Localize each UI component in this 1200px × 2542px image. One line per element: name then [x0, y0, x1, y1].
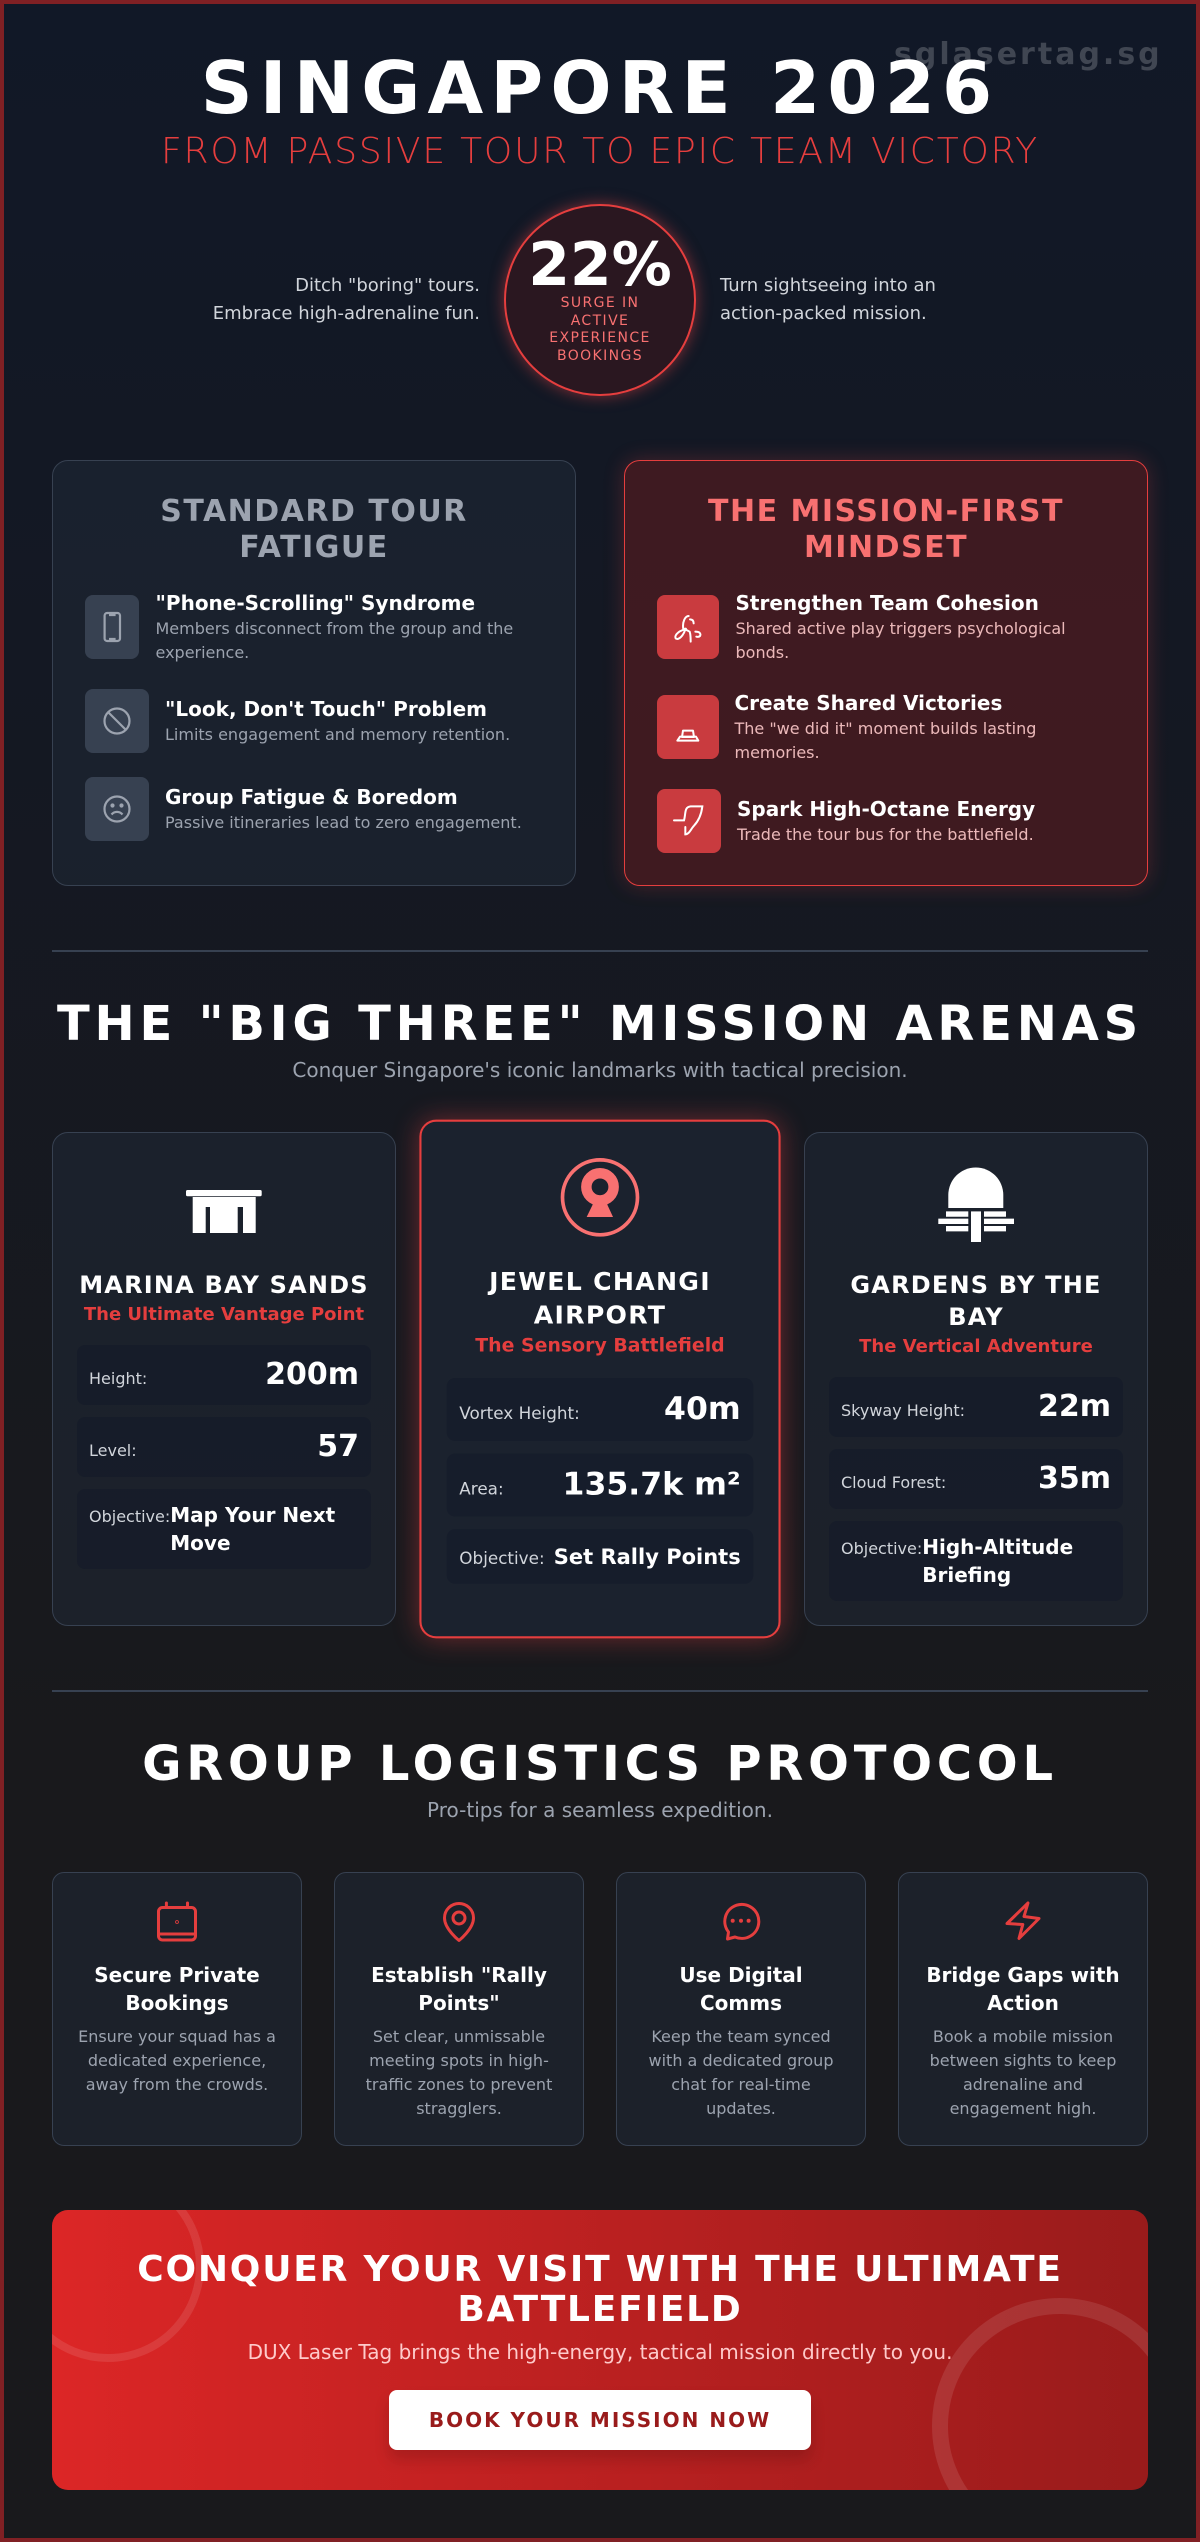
item text: [156, 591, 513, 662]
stat label: BOOKINGS: [557, 348, 643, 364]
heading: big three: THE "BIG THREE" MISSION ARENAS: [57, 996, 1143, 1052]
item text: The "we did it" moment builds lasting memories.: [734, 719, 1036, 762]
item text: [736, 591, 1066, 662]
tip: private bookings: [52, 1872, 302, 2146]
stat: cloud forest: Cloud Forest:: [841, 1473, 946, 1492]
stat: level: [77, 1417, 371, 1477]
text: left of stat: Ditch "boring" tours.: [295, 275, 480, 296]
tip: rally points: [334, 1872, 584, 2146]
panel: standard tour fatigue: [52, 460, 576, 886]
icon: sad face: [85, 777, 149, 841]
item text: Limits engagement and memory retention.: [165, 725, 510, 744]
item text: Strengthen Team Cohesion: [736, 591, 1039, 615]
item text: Spark High-Octane Energy: [737, 797, 1035, 821]
card tagline: The Vertical Adventure: [859, 1336, 1093, 1357]
item text: Passive itineraries lead to zero engagement.: [165, 813, 522, 832]
icon: lightning bolt: [1006, 1901, 1040, 1940]
text: right of stat: [720, 275, 936, 324]
item text: "Look, Don't Touch" Problem: [165, 697, 487, 721]
tip: bridge gaps: [898, 1872, 1148, 2146]
stat: level: Level:: [89, 1441, 137, 1460]
stat circle: 22% surge: [504, 204, 696, 396]
item text: [165, 785, 522, 832]
stat: objective: [829, 1521, 1123, 1601]
card tagline: The Sensory Battlefield: [475, 1335, 725, 1357]
stat: objective: [77, 1489, 371, 1569]
card: jewel changi airport: [419, 1120, 781, 1638]
tip text: Book a mobile mission between sights to keep adrenaline and engagement high.: [930, 2027, 1116, 2118]
card: gardens by the bay: [804, 1132, 1148, 1626]
cta subtext: DUX Laser Tag brings the high-energy, tactical mission directly to you.: [248, 2340, 952, 2364]
watermark: sglasertag.sg: [894, 37, 1163, 72]
icon: prohibited: [85, 689, 149, 753]
stat: height: [77, 1345, 371, 1405]
divider: [52, 1690, 1148, 1692]
subtitle: FROM PASSIVE TOUR TO EPIC TEAM VICTORY: [161, 131, 1039, 172]
icon: map pin: [443, 1902, 475, 1942]
cta heading: CONQUER YOUR VISIT WITH THE ULTIMATE BATTLEFIELD: [137, 2249, 1063, 2330]
item text: Shared active play triggers psychological bonds.: [736, 619, 1066, 662]
stat: vortex height: 40m: [664, 1391, 741, 1427]
tip text: Keep the team synced with a dedicated group chat for real-time updates.: [649, 2027, 833, 2118]
card title: GARDENS BY THE BAY: [850, 1271, 1102, 1331]
stat: area: [447, 1454, 753, 1517]
icon: trophy base: [657, 695, 719, 759]
text: left of stat: [213, 275, 480, 324]
item: high-octane energy: [657, 789, 1035, 853]
stat: height: 200m: [265, 1357, 359, 1392]
subheading: Pro-tips for a seamless expedition.: [427, 1798, 773, 1822]
stat label: SURGE IN: [561, 295, 639, 311]
stat: objective: High-Altitude Briefing: [922, 1535, 1073, 1587]
title: SINGAPORE 2026: [201, 46, 999, 130]
icon: team: [657, 595, 719, 659]
icon: supertree: [938, 1168, 1014, 1242]
stat: height: Height:: [89, 1369, 147, 1388]
cta button: [389, 2390, 811, 2450]
item text: [734, 691, 1036, 762]
item: team cohesion: [657, 591, 1066, 662]
item text: Members disconnect from the group and the experience.: [156, 619, 513, 662]
item: phone scrolling: [85, 591, 513, 662]
stat: objective: [447, 1529, 753, 1584]
stat: skyway height: 22m: [1038, 1389, 1111, 1424]
stat label: ACTIVE: [571, 312, 629, 328]
icon: jewel vortex: [560, 1158, 640, 1237]
item text: [165, 697, 510, 744]
panel heading: THE MISSION-FIRST MINDSET: [708, 494, 1064, 565]
stat: objective: Objective:: [89, 1507, 170, 1526]
divider: [52, 950, 1148, 952]
call to action banner: [52, 2210, 1148, 2490]
stat: cloud forest: [829, 1449, 1123, 1509]
item: group fatigue: [85, 777, 522, 841]
text: left of stat: Embrace high-adrenaline fun.: [213, 303, 480, 324]
icon: phone: [85, 595, 138, 659]
tip title: Secure Private Bookings: [94, 1963, 260, 2015]
icon: calendar: [157, 1902, 197, 1942]
cta button: BOOK YOUR MISSION NOW: [429, 2408, 771, 2432]
item text: Group Fatigue & Boredom: [165, 785, 458, 809]
item text: Create Shared Victories: [734, 691, 1002, 715]
tip: digital comms: [616, 1872, 866, 2146]
stat: objective: Objective:: [459, 1548, 545, 1568]
card title: MARINA BAY SANDS: [79, 1271, 369, 1299]
text: right of stat: action-packed mission.: [720, 303, 927, 324]
item text: [736, 797, 1035, 844]
stat: vortex height: [447, 1378, 753, 1441]
heading: logistics: GROUP LOGISTICS PROTOCOL: [142, 1736, 1058, 1792]
item: look don't touch: [85, 689, 510, 753]
item text: "Phone-Scrolling" Syndrome: [156, 591, 475, 615]
subheading: Conquer Singapore's iconic landmarks with tactical precision.: [292, 1058, 908, 1082]
icon: marina bay sands: [186, 1190, 262, 1233]
item text: Trade the tour bus for the battlefield.: [737, 825, 1034, 844]
card title: JEWEL CHANGI AIRPORT: [489, 1267, 711, 1330]
tip title: Bridge Gaps with Action: [926, 1963, 1120, 2015]
card tagline: The Ultimate Vantage Point: [84, 1304, 364, 1325]
tip text: Set clear, unmissable meeting spots in high-traffic zones to prevent stragglers.: [366, 2027, 552, 2118]
stat: cloud forest: 35m: [1038, 1461, 1111, 1496]
panel heading: STANDARD TOUR FATIGUE: [160, 494, 468, 565]
card: marina bay sands: [52, 1132, 396, 1626]
stat label: EXPERIENCE: [549, 330, 651, 346]
icon: chat bubble: [723, 1902, 760, 1940]
stat: skyway height: Skyway Height:: [841, 1401, 965, 1420]
stat: level: 57: [317, 1429, 359, 1464]
stat: skyway height: [829, 1377, 1123, 1437]
tip text: Ensure your squad has a dedicated experience, away from the crowds.: [78, 2027, 276, 2094]
stat: area: 135.7k m²: [563, 1466, 741, 1503]
stat value: 22%: [528, 230, 672, 300]
item: shared victories: [657, 691, 1036, 762]
stat: objective: Objective:: [841, 1539, 922, 1558]
text: right of stat: Turn sightseeing into an: [720, 275, 936, 296]
icon: energy: [657, 789, 721, 853]
stat: objective: Set Rally Points: [554, 1544, 741, 1569]
stat: vortex height: Vortex Height:: [459, 1403, 580, 1423]
panel: mission-first mindset: [624, 460, 1148, 886]
stat: area: Area:: [459, 1479, 504, 1499]
stat: objective: Map Your Next Move: [170, 1503, 335, 1555]
tip title: Establish "Rally Points": [371, 1963, 547, 2015]
tip title: Use Digital Comms: [679, 1963, 803, 2015]
stat label: [549, 295, 651, 364]
